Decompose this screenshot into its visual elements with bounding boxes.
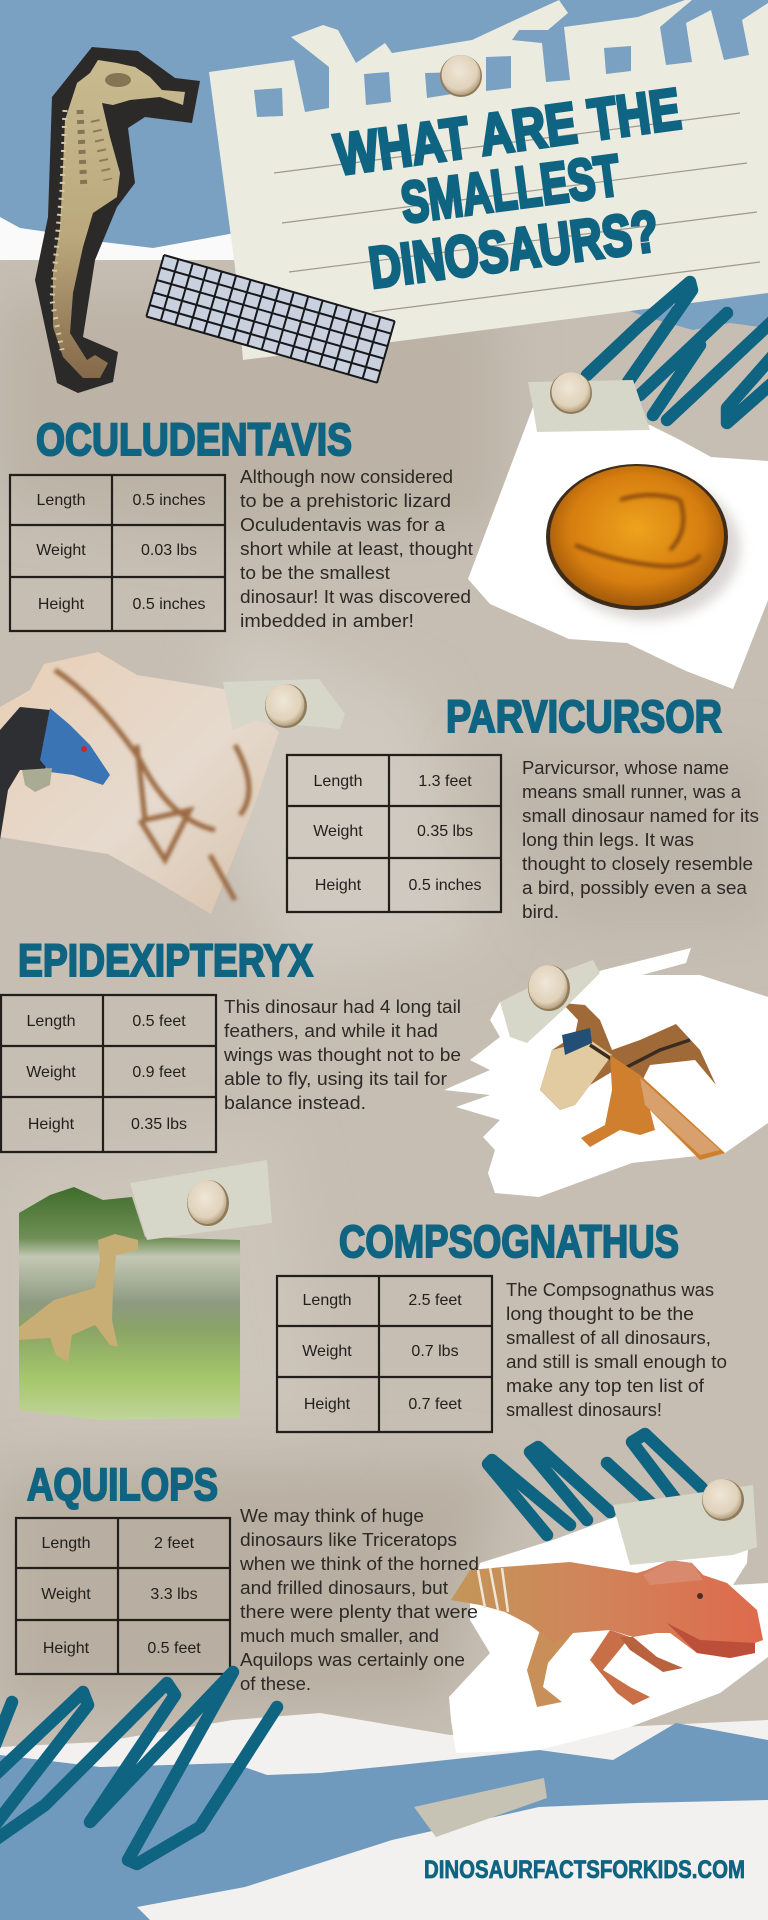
heading: Epidexipteryx: EPIDEXIPTERYX [18,935,313,986]
tape and pin: Epidexipteryx [500,960,600,1043]
table: Epidexipteryx stats: 0.9 feet [132,1064,186,1081]
text: Aquilops description: dinosaurs like Triceratops [240,1530,457,1550]
table: Oculudentavis stats: Length [37,492,85,509]
text: Parvicursor description: a bird, possibly even a sea [522,878,748,898]
text: Aquilops description: when we think of the horned [239,1554,479,1574]
feathered dinosaur [540,1003,725,1160]
text: Parvicursor description: bird. [522,902,559,922]
title: DINOSAURS? [365,198,662,301]
heading: Compsognathus: COMPSOGNATHUS [339,1216,679,1267]
text: Aquilops description: and frilled dinosaurs, but [240,1578,448,1598]
table: Oculudentavis stats: 0.5 inches [133,596,205,613]
table: Compsognathus stats: Length [303,1292,351,1309]
table: Aquilops stats: 2 feet [154,1535,195,1552]
heading: Parvicursor: PARVICURSOR [446,691,722,742]
text: Parvicursor description: thought to closely resemble [522,854,753,874]
table: Compsognathus stats: 0.7 feet [408,1396,462,1413]
text: Parvicursor description [522,758,759,922]
tape and pin: Compsognathus [130,1160,272,1240]
torn binder holes [254,46,631,117]
icon: title pin [440,55,482,97]
small dinosaur [19,1234,138,1362]
text: Aquilops description: much much smaller, and [240,1626,439,1646]
text: Aquilops description: of these. [240,1674,311,1694]
title [331,76,685,301]
table: Parvicursor stats: 0.5 inches [409,877,481,894]
table: Epidexipteryx stats: 0.35 lbs [131,1116,187,1133]
table: Parvicursor stats: Weight [313,823,363,840]
table: Aquilops stats: Weight [41,1586,91,1603]
table: Compsognathus stats [277,1276,492,1432]
panel: Epidexipteryx photo [444,948,768,1197]
text: Compsognathus description: long thought to be the [506,1304,694,1324]
text: Compsognathus description: smallest of all dinosaurs, [506,1328,711,1348]
table: Epidexipteryx stats: Weight [26,1064,76,1081]
panel: amber photo [468,407,768,689]
table: Parvicursor stats: 1.3 feet [418,773,472,790]
horned dinosaur [451,1560,763,1707]
table: Oculudentavis stats: Height [38,596,85,613]
table: Aquilops stats [16,1518,230,1674]
text: Parvicursor description: means small runner, was a [522,782,742,802]
table: Epidexipteryx stats: 0.5 feet [132,1013,186,1030]
table: Aquilops stats: Height [43,1640,90,1657]
text: Oculudentavis description: dinosaur! It was discovered [240,587,471,607]
tape and pin: Aquilops [613,1479,757,1565]
text: Compsognathus description: The Compsognathus was [506,1280,714,1300]
table: Compsognathus stats: 2.5 feet [408,1292,462,1309]
text: Aquilops description: Aquilops was certainly one [240,1650,465,1670]
text: Oculudentavis description: to be the smallest [240,563,390,583]
table: Oculudentavis stats [10,475,225,631]
table: Epidexipteryx stats: Height [28,1116,75,1133]
text: Aquilops description: We may think of huge [240,1506,424,1526]
panel: Parvicursor fossil photo [0,652,279,914]
table: Epidexipteryx stats [1,995,216,1152]
text: Aquilops description [239,1506,479,1694]
text: Oculudentavis description [240,467,473,631]
panel: Aquilops photo [449,1517,768,1753]
top right blue scribble [587,282,768,423]
panel: notebook paper with title [209,0,768,360]
text: Oculudentavis description: short while at least, thought [240,539,473,559]
table: Aquilops stats: Length [42,1535,90,1552]
tape and pin: Parvicursor [223,679,345,730]
table: Compsognathus stats: Weight [302,1343,352,1360]
text: Oculudentavis description: Although now considered [240,467,453,487]
table: Parvicursor stats: 0.35 lbs [417,823,473,840]
table: Oculudentavis stats: Weight [36,542,86,559]
heading: Aquilops: AQUILOPS [27,1459,218,1510]
table: Compsognathus stats: 0.7 lbs [411,1343,459,1360]
table: Aquilops stats: 3.3 lbs [150,1586,198,1603]
text: Epidexipteryx description: able to fly, using its tail for [224,1069,447,1089]
text: Aquilops description: there were plenty that were [240,1602,478,1622]
text: Parvicursor description: Parvicursor, whose name [522,758,729,778]
white torn strip under the top blue [0,210,260,260]
icon: grid tape [146,255,395,383]
table: Parvicursor stats: Length [314,773,362,790]
text: Oculudentavis description: imbedded in amber! [240,611,414,631]
title: WHAT ARE THE [331,76,685,188]
dinosaur head [0,707,110,840]
panel: Compsognathus photo [19,1187,240,1420]
table: Aquilops stats: 0.5 feet [147,1640,201,1657]
text: Epidexipteryx description: wings was thought not to be [223,1045,461,1065]
bottom tape [414,1778,547,1837]
text: Oculudentavis description: to be a prehistoric lizard [240,491,451,511]
text: Compsognathus description: make any top ten list of [506,1376,705,1396]
text: Compsognathus description: and still is small enough to [506,1352,727,1372]
table: Parvicursor stats [287,755,501,912]
text: Epidexipteryx description: This dinosaur had 4 long tail [224,997,461,1017]
bottom torn white and blue bands [0,1713,768,1920]
table: Oculudentavis stats: 0.5 inches [133,492,205,509]
table: Epidexipteryx stats: Length [27,1013,75,1030]
ruled lines [274,113,760,312]
text: Parvicursor description: small dinosaur named for its [522,806,759,826]
table: Compsognathus stats: Height [304,1396,351,1413]
title: SMALLEST [397,143,624,236]
table: Parvicursor stats: Height [315,877,362,894]
table: Oculudentavis stats: 0.03 lbs [141,542,197,559]
text: Compsognathus description [506,1280,727,1420]
text: Parvicursor description: long thin legs. It was [522,830,694,850]
text: Epidexipteryx description [223,997,461,1113]
text: Compsognathus description: smallest dinosaurs! [506,1400,662,1420]
text: Epidexipteryx description: feathers, and while it had [224,1021,438,1041]
middle right blue scribble [488,1434,702,1535]
heading: Oculudentavis: OCULUDENTAVIS [36,414,352,465]
tape and pin: amber [528,372,650,432]
text: Epidexipteryx description: balance instead. [224,1093,366,1113]
top blue torn paper [0,0,768,330]
bottom left blue scribble [0,1672,277,1864]
seahorse cutout [35,47,200,393]
text: Oculudentavis description: Oculudentavis was for a [240,515,446,535]
